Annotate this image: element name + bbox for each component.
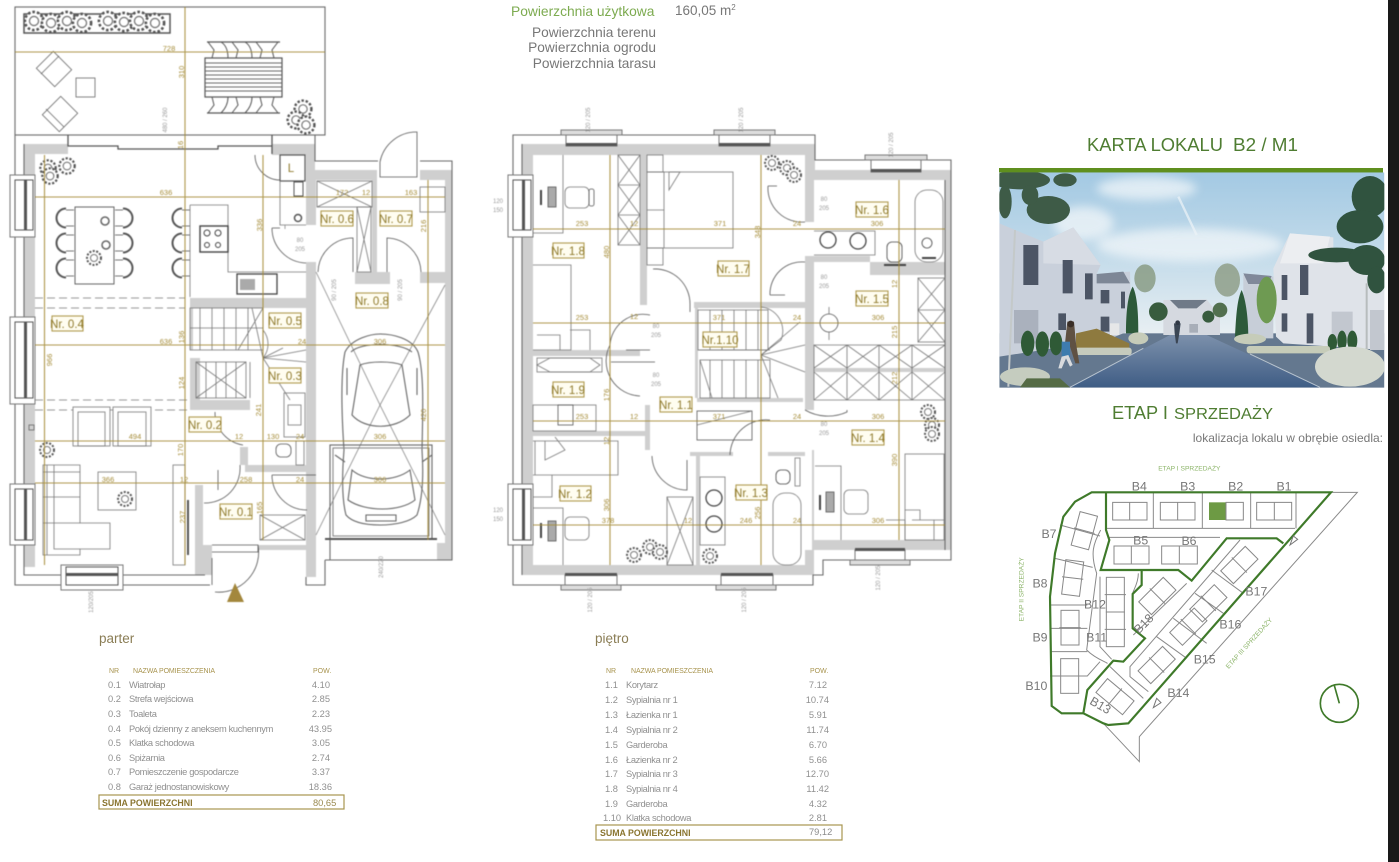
parter rows: Toaleta [129,709,158,719]
parter header: NR [109,668,119,675]
dimension labels: 24 [793,516,801,525]
plot labels: B8 [1032,576,1048,590]
parter header: NAZWA POMIESZCZENIA [133,668,215,675]
roads [1050,492,1357,762]
pietro rows: 1.5 [605,740,618,750]
pietro rows: 10.74 [806,695,829,705]
dimension labels: 24 [793,313,801,322]
road markers [1153,536,1298,708]
dimension labels: 12 [235,432,243,441]
parter rows: 0.3 [108,709,121,719]
pietro header: NAZWA POMIESZCZENIA [631,668,713,675]
plot labels: B12 [1084,598,1106,612]
dimension lines [15,7,445,565]
stairs [190,308,306,437]
dimension labels: 336 [255,219,264,231]
dimension labels: 258 [240,475,252,484]
large trees [999,172,1077,224]
dimension labels: 371 [714,219,726,228]
dimension labels: 205 [651,382,662,388]
beds [533,155,944,540]
dimension labels: 306 [871,219,883,228]
dimension labels [493,107,899,613]
pietro total: SUMA POWIERZCHNI [600,828,691,838]
parter rows: 2.85 [312,694,330,704]
plot labels: B15 [1194,653,1216,667]
pietro rows: 11.42 [806,784,829,794]
dimension labels [45,44,428,613]
surface summary [511,3,736,71]
plot labels: B17 [1245,584,1267,598]
surface summary: Powierzchnia ogrodu [528,40,656,55]
terrace dining table [205,42,282,113]
dimension labels: 120 / 205 [739,107,745,133]
parter rows: 0.1 [108,680,121,690]
pietro rows: 11.74 [806,725,829,735]
dimension labels: 150 [493,517,504,523]
parter rows: 0.5 [108,738,121,748]
parter rows: 18.36 [309,782,332,792]
surface summary: 2 [731,3,736,12]
distant houses [1163,299,1220,335]
mid trees [1126,287,1248,337]
dark screen edge [1388,0,1399,862]
pietro table [595,631,842,840]
title: karta lokalu: B2 / M1 [1233,134,1298,155]
dimension labels: 24 [298,337,306,346]
terrace [15,7,325,135]
plants [627,156,939,563]
dimension labels: 12 [630,412,638,421]
plot labels: B13 [1087,694,1113,717]
parter rows: Strefa wejściowa [129,694,194,704]
bedroom furniture [533,155,945,565]
parter rows: Pokój dzienny z aneksem kuchennym [129,724,274,734]
left buildings [999,223,1132,357]
dimension labels: 16 [176,141,185,149]
dimension labels: 215 [890,326,899,338]
stairs [697,307,805,440]
dimension labels: 306 [602,499,611,511]
title: karta lokalu: KARTA LOKALU [1087,134,1223,155]
dimension labels: 480 / 260 [163,107,169,133]
phase labels [1016,464,1275,671]
room labels: Nr. 1.7 [716,264,750,276]
dimension labels: 253 [576,313,588,322]
dimension lines [533,155,945,565]
plot labels: B4 [1132,479,1147,493]
room labels: Nr. 0.8 [355,296,389,308]
dimension labels: 120 / 205 [586,107,592,133]
plant corner [40,158,75,184]
walls [513,135,951,585]
parter rows: 3.37 [312,767,330,777]
room labels: Nr.1.10 [701,335,739,347]
pietro rows: 1.7 [605,769,618,779]
room labels: Nr. 1.9 [551,385,585,397]
phase labels: ETAP I SPRZEDAŻY [1158,464,1221,473]
dimension labels: 80 [653,373,660,379]
closet 1.9 [533,358,602,431]
plot labels: B5 [1133,533,1148,547]
parter rows: 0.6 [108,753,121,763]
title: karta lokalu [1087,134,1298,155]
dimension labels: 176 [602,389,611,401]
dimension labels: 240/220 [379,556,385,578]
car [325,334,437,539]
windows [10,175,123,590]
dimension labels: 12 [180,475,188,484]
parter total: 80,65 [313,798,336,808]
parter rows: Garaż jednostanowiskowy [129,782,230,792]
compass [1320,684,1358,722]
dimension labels: 253 [576,219,588,228]
walls [15,135,452,585]
WC, doors, entry [204,132,445,592]
dimension labels: 306 [374,475,386,484]
phase labels: ETAP II SPRZEDAŻY [1016,557,1025,621]
pietro total [596,825,842,840]
dimension labels: 306 [872,412,884,421]
dining table [56,207,190,284]
parter rows: Wiatrołap [129,680,165,690]
surface summary: 160,05 m [675,3,731,18]
lounge chairs [36,51,95,132]
dimension labels: 310 [177,66,186,78]
parter rows: Spiżarnia [129,753,166,763]
dimension labels: 80 [821,422,828,428]
plot labels: B3 [1180,479,1195,493]
pietro rows: 5.91 [809,710,827,720]
parter rows: 2.23 [312,709,330,719]
dimension labels: 12 [630,312,638,321]
pietro header [606,668,828,675]
parter rows: 0.8 [108,782,121,792]
pietro rows: 5.66 [809,755,827,765]
dimension labels: 494 [129,432,141,441]
parter heading: parter [99,631,135,646]
people [1065,322,1079,363]
pietro rows: Klatka schodowa [626,813,692,823]
dimension labels: 80 [821,275,828,281]
plant [288,101,314,133]
dimension labels: 24 [296,475,304,484]
dimension labels: 636 [160,337,172,346]
dimension labels: 205 [819,284,830,290]
dimension labels: 205 [819,431,830,437]
dimension labels: 212 [890,372,899,384]
parter rows [108,680,332,792]
dimension labels: 237 [178,511,187,523]
room labels: Nr. 0.6 [320,214,354,226]
pietro rows: Sypialnia nr 4 [626,784,678,794]
dimension labels: 120 / 205 [742,587,748,613]
parter rows: Klatka schodowa [129,738,195,748]
pietro rows: 1.9 [605,799,618,809]
dimension labels: 371 [713,313,725,322]
parter total: SUMA POWIERZCHNI [102,798,193,808]
dimension labels: 150 [493,208,504,214]
pietro rows: 7.12 [809,680,827,690]
room labels: Nr. 1.5 [855,294,889,306]
dimension labels: 366 [102,475,114,484]
room labels: Nr. 0.2 [188,420,222,432]
photo: street visualisation [990,171,1388,388]
surface summary: Powierzchnia tarasu [533,56,656,71]
pietro rows: 6.70 [809,740,827,750]
kitchen [190,155,306,297]
dimension labels: 371 [713,412,725,421]
dimension labels: 120 [493,199,504,205]
pietro rows: Łazienka nr 1 [626,710,677,720]
plot labels: B9 [1032,630,1048,644]
parter total [99,795,344,809]
wardrobes [618,155,945,565]
dimension labels: 120 / 205 [889,132,895,158]
pietro rows: 1.10 [603,813,621,823]
pietro header: POW. [810,668,828,675]
etap heading: SPRZEDAŻY [1174,404,1273,423]
doors [606,186,847,490]
parter rows: 0.2 [108,694,121,704]
dimension labels: 12 [602,437,611,445]
dimension labels: 205 [819,206,830,212]
dimension labels: 966 [45,354,54,366]
dimension labels: 390 [890,454,899,466]
dimension labels: 306 [374,337,386,346]
dimension labels: 420 [419,409,428,421]
green bar [999,168,1383,172]
etap heading [1112,403,1273,423]
dimension labels: 253 [576,412,588,421]
dimension labels: 216 [419,220,428,232]
plot labels: B10 [1025,679,1047,693]
pietro rows: 1.8 [605,784,618,794]
pietro total: 79,12 [809,827,832,837]
pietro rows: Garderoba [626,799,668,809]
dimension labels: 378 [602,516,614,525]
etap heading: ETAP I [1112,403,1168,423]
room labels: Nr. 0.4 [50,319,85,331]
room labels: Nr. 1.8 [551,246,585,258]
plot labels: B14 [1167,686,1189,700]
plot labels: B11 [1086,631,1107,645]
dimension labels: 24 [296,432,304,441]
pietro heading: piętro [595,631,629,646]
dimension labels: 120 / 205 [876,565,882,591]
dimension labels: 728 [163,44,175,53]
dimension labels: 636 [160,188,172,197]
pietro rows: Garderoba [626,740,668,750]
floor plan: pietro [493,107,951,613]
dimension labels: 480 [602,246,611,258]
room labels [551,202,889,501]
parter header [109,668,331,675]
parter rows: 4.10 [312,680,330,690]
house footprints [1059,502,1292,716]
parter header: POW. [313,668,331,675]
parter rows: 2.74 [312,753,330,763]
dimension labels: 306 [872,313,884,322]
dimension labels: 205 [651,333,662,339]
pietro header: NR [606,668,616,675]
pietro rows: 1.4 [605,725,618,735]
entrance arrow [227,583,244,602]
dimension labels: 80 [297,238,304,244]
parter rows: 0.4 [108,724,121,734]
parter table [99,631,344,809]
room labels: Nr. 0.3 [268,371,302,383]
parter rows: 43.95 [309,724,332,734]
dimension labels: 348 [753,226,762,238]
pietro rows: 4.32 [809,799,827,809]
plot labels [1025,479,1292,717]
desks and chairs [533,155,868,565]
shrubs and car [1021,331,1034,356]
plot labels: B6 [1181,534,1197,548]
dimension labels: 246 [740,516,752,525]
planter with shrubs [24,12,170,33]
dimension labels: 24 [793,412,801,421]
parter rows: Pomieszczenie gospodarcze [129,767,239,777]
sky [999,172,1384,339]
dimension labels: 205 [295,247,306,253]
dimension labels: 165 [255,502,264,514]
pietro rows: 2.81 [809,813,827,823]
pietro rows [603,680,829,823]
site map [1016,464,1358,762]
dimension labels: 12 [684,516,692,525]
dimension labels: 90 / 205 [332,278,338,301]
dimension labels: 90 / 205 [398,278,404,301]
dimension labels: 12 [630,219,638,228]
pietro rows: 1.3 [605,710,618,720]
dimension labels: 241 [254,404,263,416]
room labels: Nr. 1.3 [734,488,768,500]
dimension labels: 170 [176,444,185,456]
phase boundaries [1050,492,1331,725]
dimension labels: 306 [872,516,884,525]
room labels: Nr. 1.2 [558,489,592,501]
pietro rows: Łazienka nr 2 [626,755,677,765]
room labels: Nr. 1.1 [659,400,693,412]
pietro rows: Korytarz [626,680,659,690]
windows [508,130,927,590]
right buildings [1273,233,1384,350]
dimension labels: 120 / 205 [588,587,594,613]
pietro rows: 12.70 [806,769,829,779]
room labels: Nr. 0.7 [379,214,413,226]
dimension labels: 24 [793,219,801,228]
dimension labels: 256 [753,507,762,519]
parter rows: 0.7 [108,767,121,777]
dimension labels: 306 [374,432,386,441]
living room furniture [29,155,306,565]
surface summary: Powierzchnia użytkowa [511,4,655,19]
phase labels: ETAP III SPRZEDAŻY [1223,615,1275,671]
room labels [50,163,413,519]
pietro rows: Sypialnia nr 2 [626,725,678,735]
dimension labels: 120 [493,508,504,514]
sofa [29,407,188,565]
plot labels: B2 [1228,479,1243,493]
parter rows: 3.05 [312,738,330,748]
dimension labels: 163 [405,188,417,197]
floor plan: parter [10,7,452,613]
room labels: Nr. 1.4 [851,433,886,445]
dimension labels: 172 [336,188,348,197]
pietro rows: 1.2 [605,695,618,705]
dimension labels: 130 [267,432,279,441]
bathrooms [700,190,943,565]
pietro rows: Sypialnia nr 3 [626,769,678,779]
room labels: L [288,163,295,175]
plot labels: B1 [1276,479,1292,493]
dimension labels: 12 [362,188,370,197]
room labels: Nr. 0.1 [219,507,253,519]
plot labels: B18 [1131,611,1157,637]
room labels: Nr. 1.6 [855,205,889,217]
dimension labels: 80 [653,324,660,330]
dimension labels: 120/205 [89,590,95,613]
dimension labels: 136 [177,331,186,343]
pietro rows: 1.1 [605,680,618,690]
pietro rows: Sypialnia nr 1 [626,695,678,705]
ground [999,333,1384,388]
surface summary: Powierzchnia terenu [532,25,656,40]
pietro rows: 1.6 [605,755,618,765]
dimension labels: 80 [821,197,828,203]
room labels: Nr. 0.5 [268,316,302,328]
plot labels: B7 [1041,527,1057,541]
dimension labels: 124 [177,377,186,389]
location caption: lokalizacja lokalu w obrębie osiedla: [1193,431,1383,445]
dimension labels: 12 [890,280,899,288]
plot labels: B16 [1219,618,1241,632]
